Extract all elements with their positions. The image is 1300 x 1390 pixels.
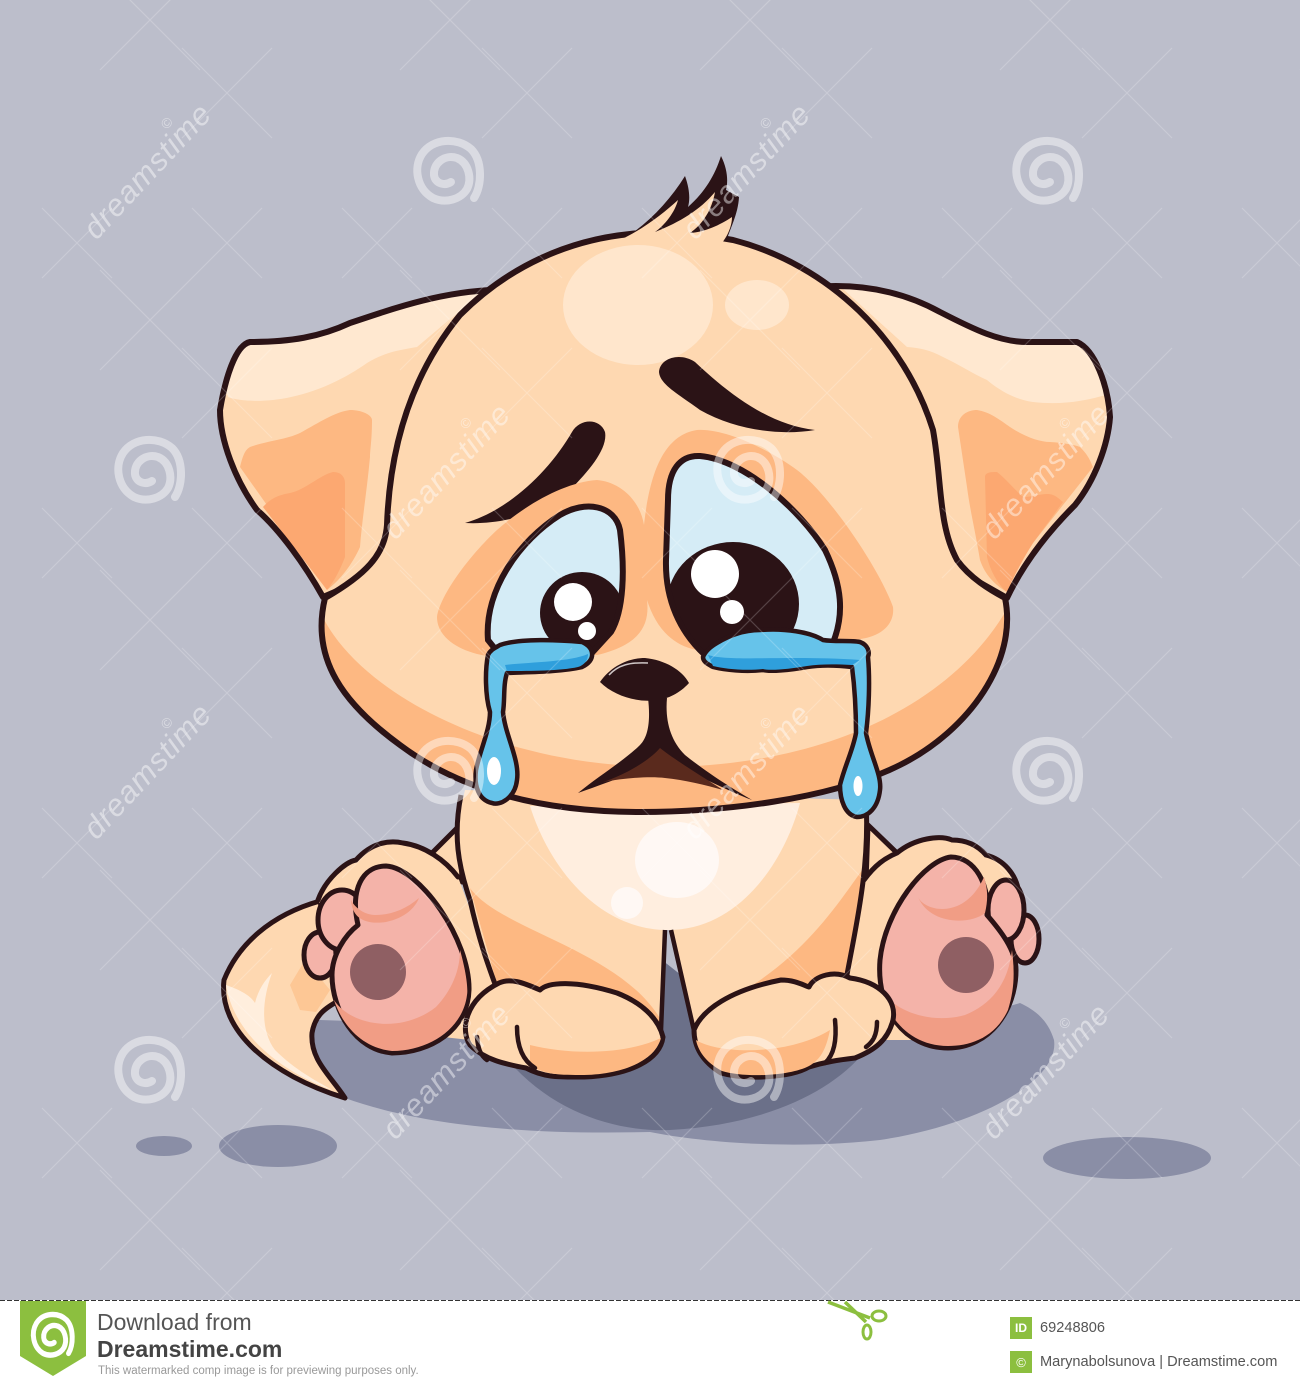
left front paw bbox=[465, 981, 663, 1077]
left eye bbox=[488, 507, 624, 655]
head highlights bbox=[563, 245, 713, 365]
watermark: dreamstime bbox=[675, 696, 818, 846]
hair tuft front bbox=[622, 192, 732, 262]
footer heading: Download from bbox=[97, 1309, 252, 1335]
footer brand: Dreamstime.com bbox=[97, 1336, 282, 1362]
nose bbox=[600, 658, 689, 701]
right hind leg and foot bbox=[830, 825, 1039, 1048]
watermark: dreamstime bbox=[375, 996, 518, 1146]
watermark: © bbox=[456, 1013, 475, 1032]
watermark: © bbox=[157, 713, 176, 732]
watermark bbox=[76, 96, 1117, 1146]
right front paw bbox=[694, 974, 894, 1077]
lower head shading bbox=[324, 614, 1004, 809]
mouth bbox=[578, 698, 752, 800]
watermark: dreamstime bbox=[675, 96, 818, 246]
watermark: © bbox=[456, 413, 475, 432]
footer disclaimer: This watermarked comp image is for previewing purposes only. bbox=[98, 1365, 419, 1377]
small floor blobs bbox=[136, 1125, 1211, 1179]
watermark: dreamstime bbox=[76, 696, 219, 846]
left eyebrow bbox=[465, 422, 605, 523]
right tear bbox=[703, 629, 880, 817]
tail bbox=[224, 901, 345, 1098]
left tear bbox=[476, 640, 592, 804]
right eyebrow bbox=[659, 357, 815, 432]
icon: scissors bbox=[828, 1302, 886, 1339]
watermark: © bbox=[756, 113, 775, 132]
right eye bbox=[666, 456, 840, 666]
image id: 69248806 bbox=[1040, 1320, 1105, 1336]
left ear bbox=[217, 287, 488, 600]
left hind leg and foot bbox=[304, 825, 500, 1053]
body bbox=[457, 790, 868, 1040]
icon: ID badge bbox=[1010, 1317, 1032, 1339]
icon: ID badge: ID bbox=[1015, 1321, 1027, 1335]
head bbox=[300, 192, 1030, 830]
floor shadow bbox=[308, 960, 1054, 1145]
hair tuft back bbox=[625, 156, 739, 245]
right ear bbox=[830, 283, 1113, 600]
watermark: dreamstime bbox=[375, 396, 518, 546]
watermark: dreamstime bbox=[974, 996, 1117, 1146]
watermark: © bbox=[1055, 1013, 1074, 1032]
watermark: © bbox=[1055, 413, 1074, 432]
chest bib bbox=[530, 803, 800, 930]
icon: copyright badge bbox=[1010, 1351, 1032, 1373]
watermark: dreamstime bbox=[974, 396, 1117, 546]
watermark: © bbox=[157, 113, 176, 132]
watermark: © bbox=[756, 713, 775, 732]
author credit: Marynabolsunova | Dreamstime.com bbox=[1040, 1354, 1277, 1370]
footer panel bbox=[0, 1300, 1300, 1390]
watermark: dreamstime bbox=[76, 96, 219, 246]
icon: copyright badge: © bbox=[1016, 1355, 1026, 1370]
eye patches bbox=[437, 430, 893, 657]
icon: green ribbon logo bbox=[20, 1301, 86, 1376]
